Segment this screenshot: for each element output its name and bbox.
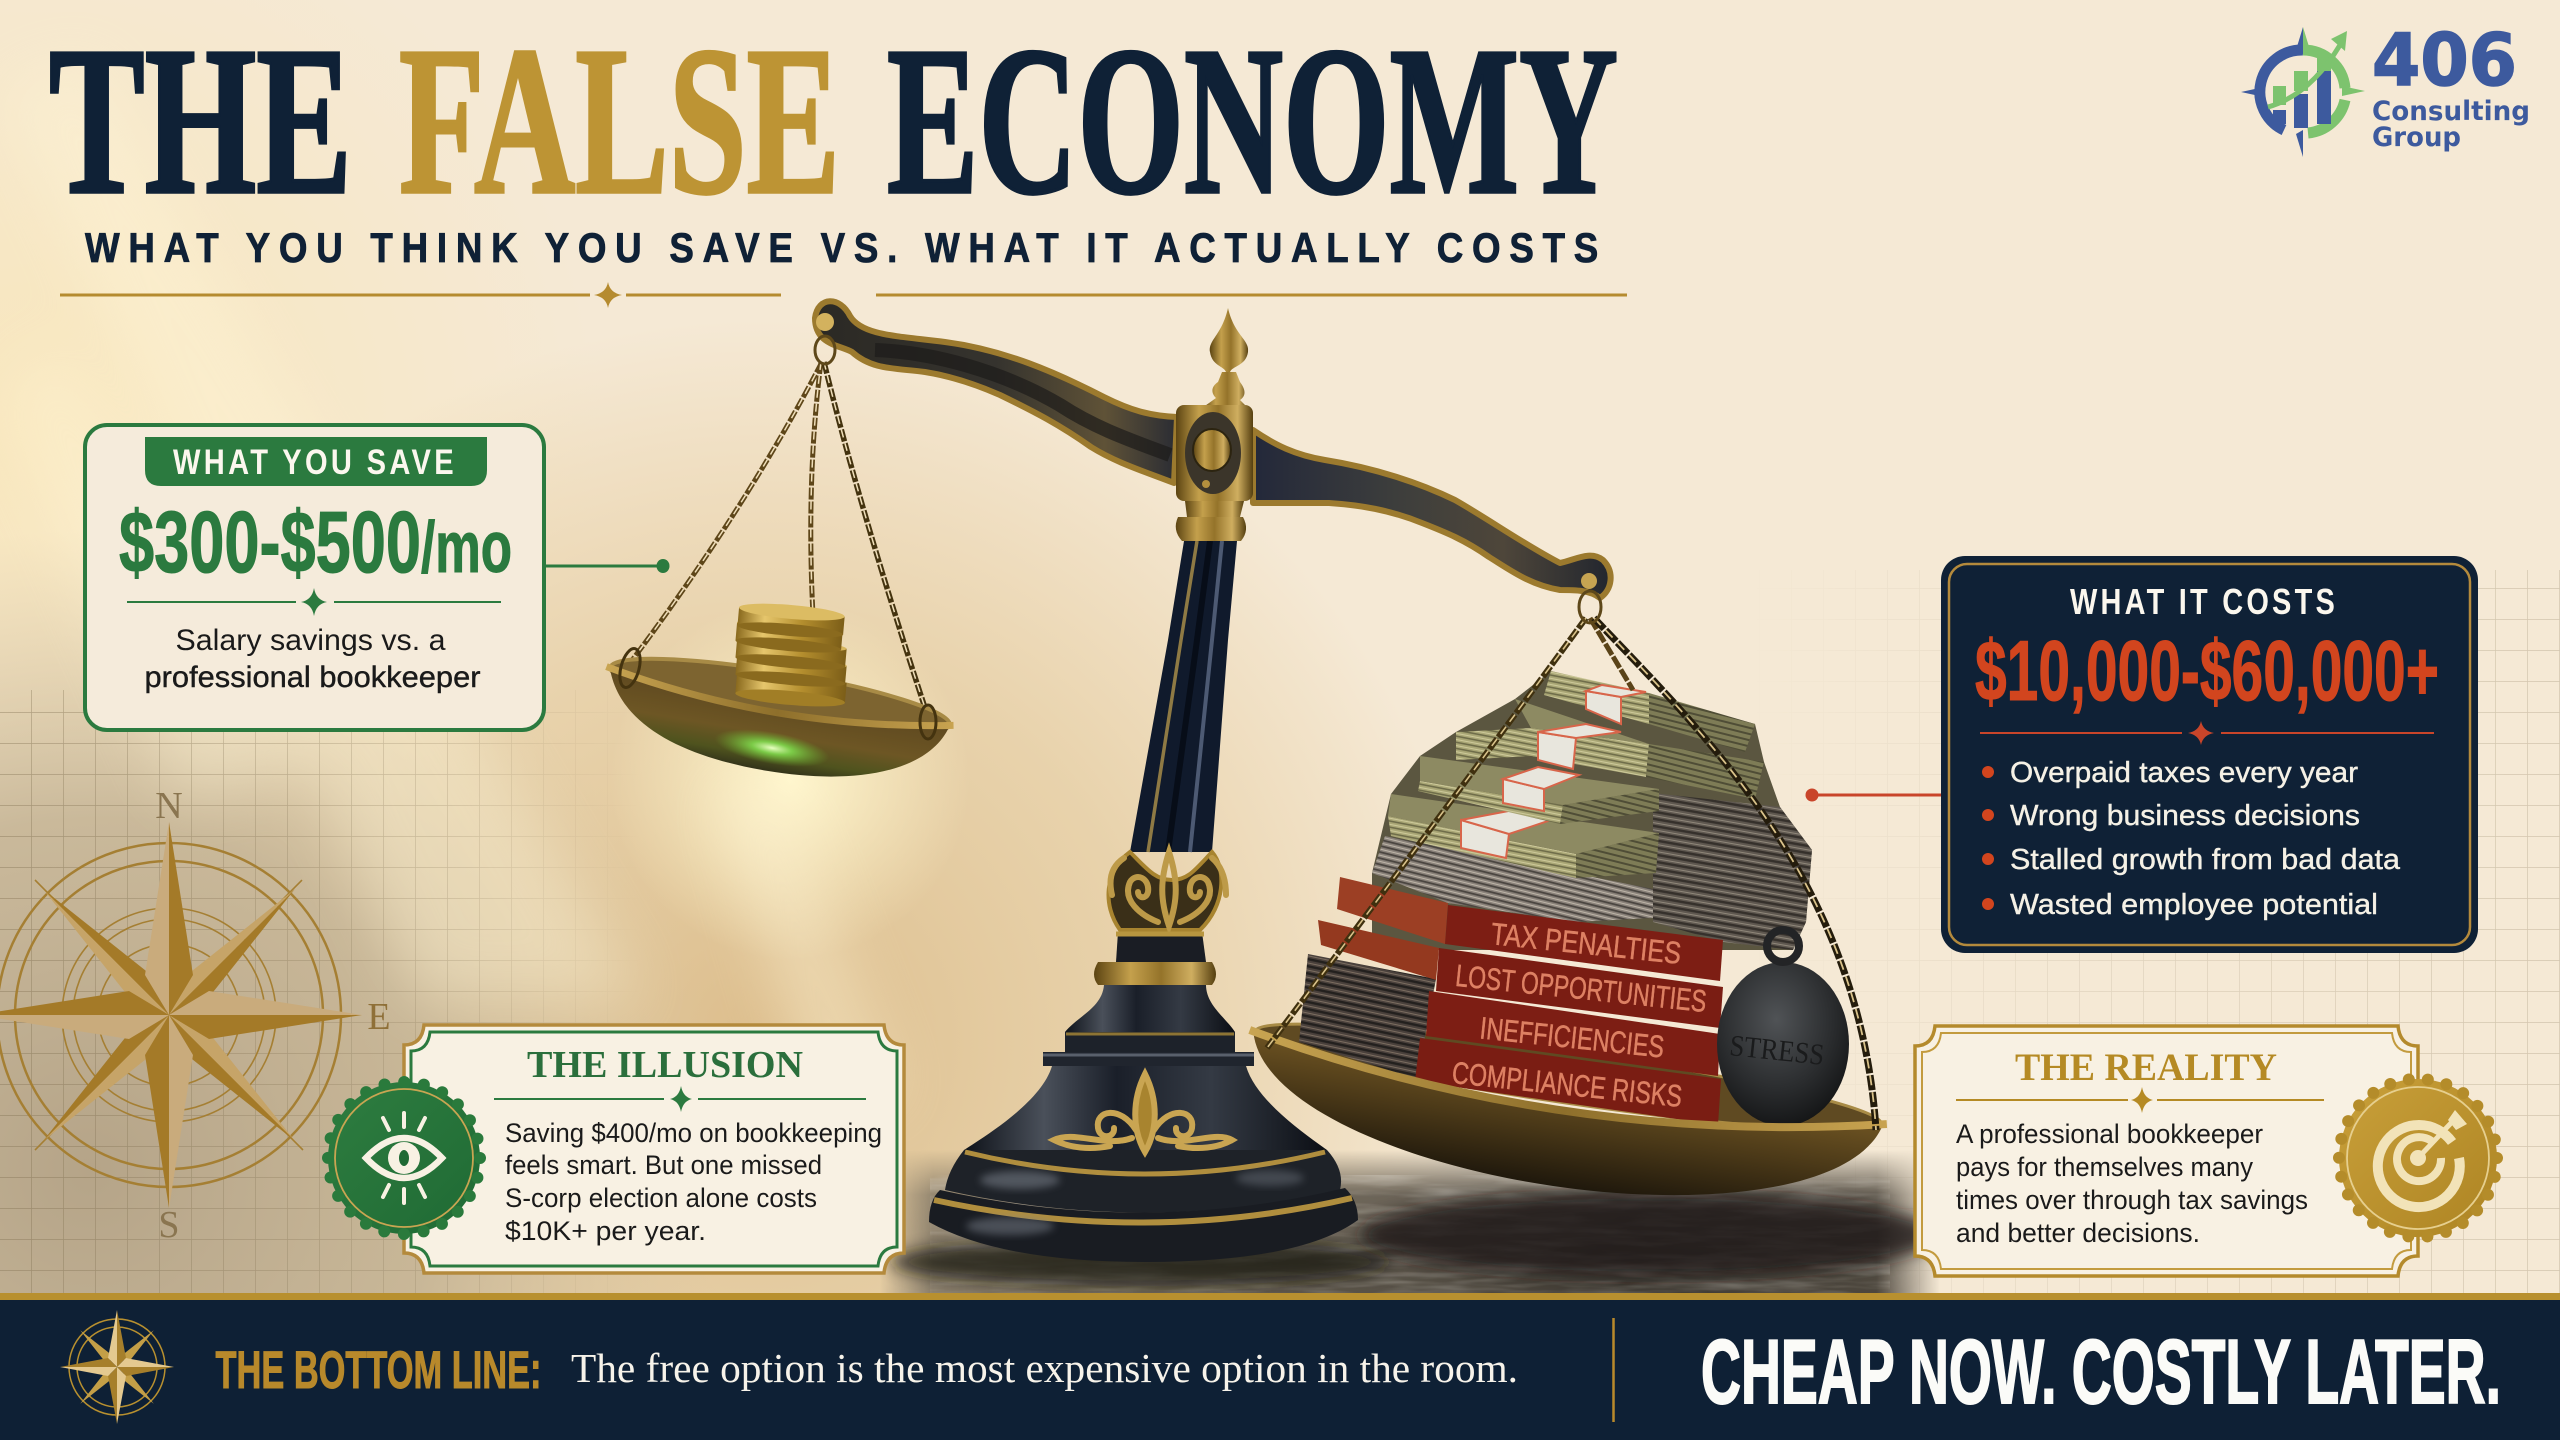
title	[49, 3, 1618, 238]
book: inefficiencies: INEFFICIENCIES	[1478, 1010, 1666, 1065]
bottom line label: THE BOTTOM LINE:	[216, 1341, 542, 1400]
left chains	[630, 362, 928, 717]
icon: small compass	[60, 1310, 174, 1424]
title divider	[60, 282, 1627, 308]
book: tax penalties: TAX PENALTIES	[1489, 916, 1683, 971]
dark stack low left	[1299, 954, 1436, 1079]
body text: feels smart. But one missed	[505, 1150, 822, 1180]
icon: gold flourish on base	[1054, 1074, 1232, 1152]
compass rose: S	[158, 1204, 180, 1246]
iron weight labelled stress: STRESS	[1728, 1029, 1826, 1072]
right pan back rim	[1252, 1005, 1885, 1149]
scale: pedestal and column	[929, 541, 1358, 1262]
bottom line sentence: The free option is the most expensive option in the room.	[571, 1345, 1518, 1391]
price: /mo	[421, 508, 512, 588]
panel: what it costs: WHAT IT COSTS	[2070, 581, 2338, 622]
pivot block	[1176, 405, 1253, 501]
panel: what you save	[85, 425, 544, 730]
body text: pays for themselves many	[1956, 1152, 2253, 1182]
body text: times over through tax savings	[1956, 1185, 2308, 1215]
bullet list: Wrong business decisions	[2010, 800, 2360, 832]
logo: 406 Consulting Group: Group	[2372, 122, 2461, 153]
description: Salary savings vs. a	[176, 624, 446, 657]
book stack with labels	[1318, 877, 1723, 1125]
bundle 2	[1456, 699, 1764, 799]
finial	[1202, 308, 1248, 408]
icon: fluted column shaft	[1130, 541, 1237, 852]
body text: A professional bookkeeper	[1956, 1119, 2263, 1149]
body text	[505, 1118, 882, 1246]
panel: the illusion: THE ILLUSION	[527, 1044, 803, 1086]
bundle 3	[1418, 756, 1659, 824]
description: professional bookkeeper	[144, 661, 480, 694]
bundle 1	[1544, 671, 1755, 752]
connector: what you save	[545, 559, 670, 573]
description	[144, 624, 480, 694]
title: FALSE	[399, 3, 840, 238]
floor with shadow	[880, 1150, 1940, 1300]
beam left arm	[815, 301, 1177, 483]
book: inefficiencies	[1426, 991, 1720, 1076]
compass rose: E	[367, 996, 391, 1038]
body text	[1956, 1119, 2308, 1248]
icon: column ornament	[1109, 852, 1226, 930]
beam end knobs	[815, 313, 1601, 623]
connector: what it costs	[1806, 788, 1941, 802]
bullet list: Overpaid taxes every year	[2010, 757, 2358, 789]
title: ECONOMY	[887, 3, 1618, 238]
book: tax penalties	[1445, 905, 1723, 981]
bullet list: Stalled growth from bad data	[2010, 844, 2401, 876]
compass rose	[0, 785, 391, 1246]
bullet list	[1982, 757, 2401, 921]
book: lost opportunities: LOST OPPORTUNITIES	[1454, 958, 1708, 1019]
dark stack right	[1653, 793, 1812, 950]
book: compliance risks: COMPLIANCE RISKS	[1450, 1055, 1684, 1114]
panel: the illusion	[404, 1025, 904, 1273]
left pan with coins	[594, 600, 954, 800]
panel: the reality: THE REALITY	[2015, 1046, 2277, 1089]
title: THE	[49, 3, 352, 238]
subtitle: WHAT YOU THINK YOU SAVE VS. WHAT IT ACTUALLY COSTS	[85, 224, 1607, 271]
bullet list: Wasted employee potential	[2010, 889, 2378, 921]
body text: $10K+ per year.	[505, 1216, 706, 1246]
header tab: WHAT YOU SAVE	[173, 443, 457, 482]
body text: Saving $400/mo on bookkeeping	[505, 1118, 882, 1148]
bundle 4	[1388, 794, 1659, 878]
column collar	[1176, 501, 1246, 541]
panel: what it costs	[1941, 556, 2478, 953]
book: compliance risks	[1415, 1038, 1721, 1125]
compass rose: N	[155, 785, 183, 827]
panel: the reality	[1915, 1026, 2418, 1276]
iron weight labelled stress	[1717, 930, 1849, 1126]
icon: coin stack	[735, 600, 847, 710]
icon: target seal	[2339, 1079, 2497, 1237]
scale: beam and pivot	[815, 301, 1611, 623]
icon: pedestal base	[929, 932, 1358, 1262]
money pile	[1299, 671, 1812, 1079]
right chains	[1267, 618, 1876, 1130]
logo: 406 Consulting Group: Consulting	[2372, 96, 2530, 127]
header tab	[145, 437, 487, 486]
footer band	[0, 1293, 2560, 1440]
body text: and better decisions.	[1956, 1218, 2200, 1248]
beam right arm	[1253, 430, 1611, 598]
logo: 406 Consulting Group: 406	[2372, 18, 2517, 102]
icon: eye seal	[328, 1082, 480, 1234]
logo: 406 Consulting Group	[2241, 18, 2530, 157]
grey stack	[1372, 836, 1653, 922]
book: lost opportunities	[1436, 948, 1723, 1028]
right pan bowl	[1234, 1030, 1887, 1233]
price: $300-$500	[119, 494, 421, 591]
body text: S-corp election alone costs	[505, 1183, 817, 1213]
